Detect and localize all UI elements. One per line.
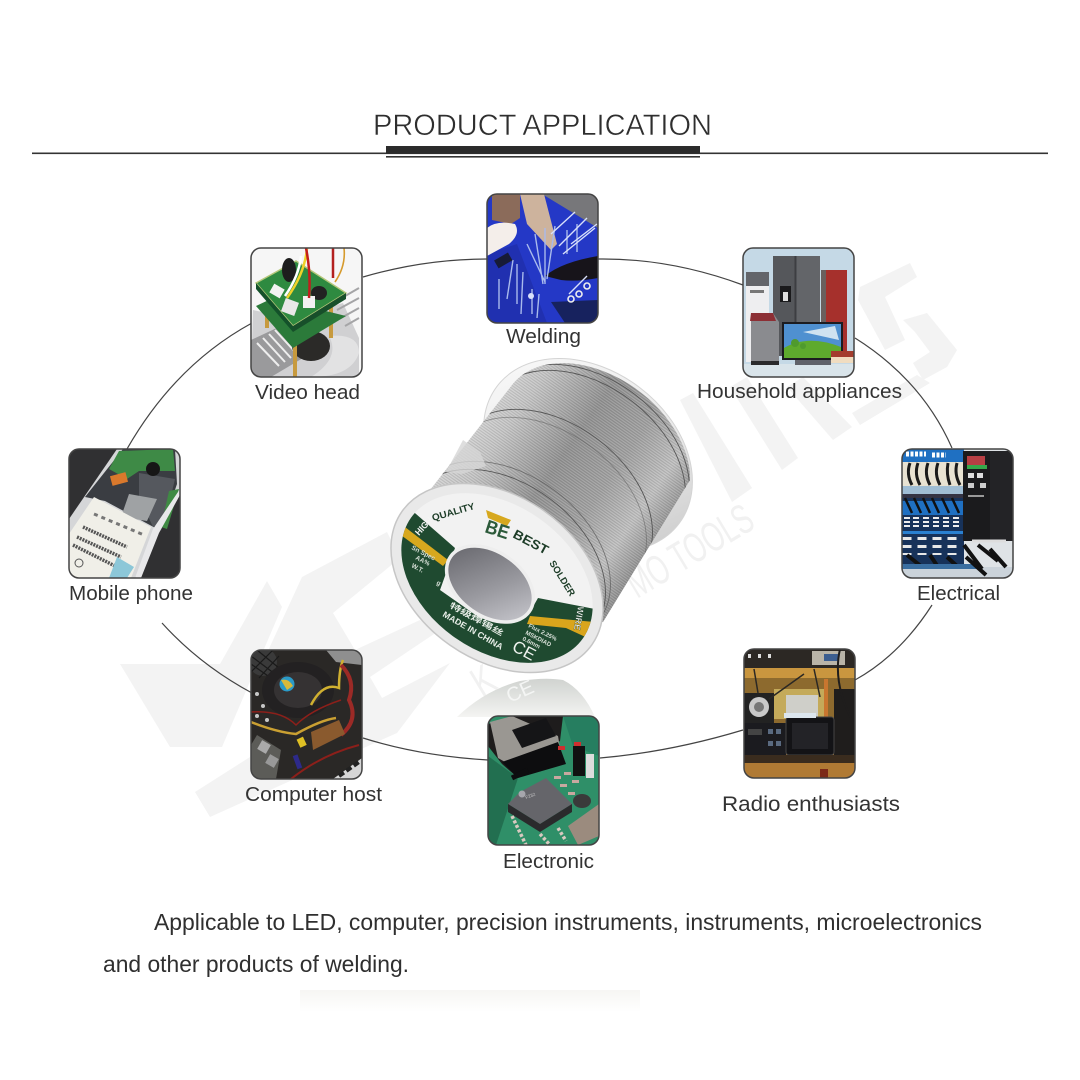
spool specs left: g [435,580,442,588]
spool specs left [410,545,442,588]
watermark: small tilted letter: K [462,655,504,706]
thumbnail: video head [251,248,362,377]
thumbnail: electrical [902,449,1013,578]
watermark: small tilted text: MO TOOLS [617,494,762,607]
thumbnail: mobile phone [69,449,180,578]
label: welding: Welding [506,325,581,348]
label: electrical: Electrical [917,582,1000,605]
spool specs right: Flux 2.25% [527,623,558,643]
description text: and other products of welding. [103,951,409,977]
thumbnail: welding [487,194,598,323]
spool brand: BEST [511,526,551,558]
spool front flange [390,482,604,674]
spool wire body [432,363,690,622]
spool specs left: Sn Spec [410,545,436,563]
thumbnail: electronic [488,716,599,845]
description text [103,909,982,977]
spool text: high quality: QUALITY [431,501,477,524]
spool specs right [521,623,558,650]
spool made in china: MADE IN CHINA [441,609,505,652]
spool specs left: AA% [414,555,431,568]
spool text: high quality [413,501,477,537]
spool logo: BE [482,517,512,544]
thumbnail: radio enthusiasts [744,649,855,778]
label: household appliances: Household appliances [697,380,902,403]
spool made in china: 特级焊锡丝 [448,600,505,638]
spool back flange [446,319,730,591]
connecting ring arcs [127,259,952,760]
spool text: high quality: HIGH [413,515,435,537]
spool product name: SOLDER [546,559,577,599]
description text: Applicable to LED, computer, precision instruments, instruments, microelectronics [154,909,982,935]
watermark: large faint logo [120,263,957,817]
spool hole [432,530,548,638]
thumbnail: electronic: F232 [525,792,536,800]
floor reflection [300,990,640,1012]
spool reflection [457,676,595,717]
thumbnail: computer host [249,648,362,779]
title rule [32,146,1048,158]
spool green label [401,513,593,663]
spool CE mark: CE [509,637,539,665]
thumbnail: household appliances [743,248,854,377]
title: PRODUCT APPLICATION [373,109,712,142]
label: computer host: Computer host [245,784,382,806]
solder wire spool [390,358,693,717]
spool specs right: MSKDIAD [524,630,552,649]
label: radio enthusiasts: Radio enthusiasts [722,792,900,816]
spool wire word: WIRE [572,606,586,631]
label: video head: Video head [255,381,360,404]
spool reflection: CE [503,676,537,708]
label: mobile phone: Mobile phone [69,582,193,605]
spool specs right: 0.6mm [521,636,541,650]
label: electronic: Electronic [503,851,594,873]
spool specs left: W.T. [410,563,425,575]
